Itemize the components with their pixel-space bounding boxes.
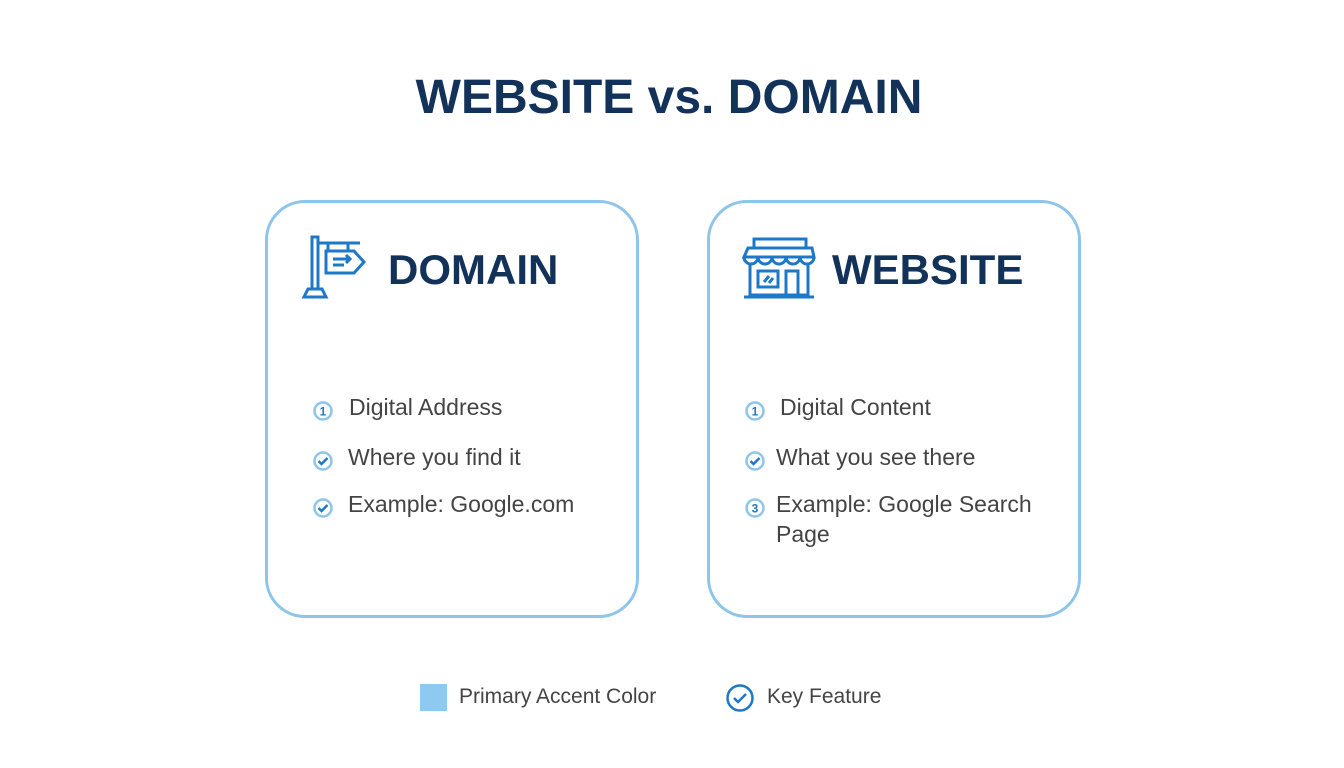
item 1: Digital Content	[780, 394, 931, 420]
icon: number 3	[745, 498, 765, 518]
icon: number 1: 1	[320, 404, 327, 418]
item 2: Where you find it	[348, 444, 521, 470]
item 2: What you see there	[776, 444, 975, 470]
icon: check	[313, 498, 333, 518]
icon: check	[745, 451, 765, 471]
icon: number 3: 3	[752, 502, 759, 516]
legend label: accent: Primary Accent Color	[459, 685, 656, 708]
item 3: Page	[776, 521, 830, 547]
list: website features	[745, 394, 1032, 547]
heading: website: WEBSITE	[832, 246, 1023, 293]
title: WEBSITE vs. DOMAIN	[416, 71, 922, 124]
legend label: key feature: Key Feature	[767, 685, 881, 708]
icon: number 1	[745, 401, 765, 421]
icon: signpost	[302, 236, 366, 298]
legend	[420, 684, 881, 712]
list: domain features	[313, 394, 574, 518]
panel: domain	[265, 200, 639, 618]
icon: number 1: 1	[752, 404, 759, 418]
panel: website	[707, 200, 1081, 618]
item 3: Example: Google Search	[776, 491, 1032, 517]
item 3: Example: Google.com	[348, 491, 574, 517]
icon: check	[313, 451, 333, 471]
item 3	[776, 491, 1032, 547]
icon: number 1	[313, 401, 333, 421]
legend icon: check	[726, 684, 754, 712]
legend swatch	[420, 684, 447, 711]
heading: domain: DOMAIN	[388, 246, 558, 293]
icon: storefront	[742, 238, 816, 298]
item 1: Digital Address	[349, 394, 502, 420]
